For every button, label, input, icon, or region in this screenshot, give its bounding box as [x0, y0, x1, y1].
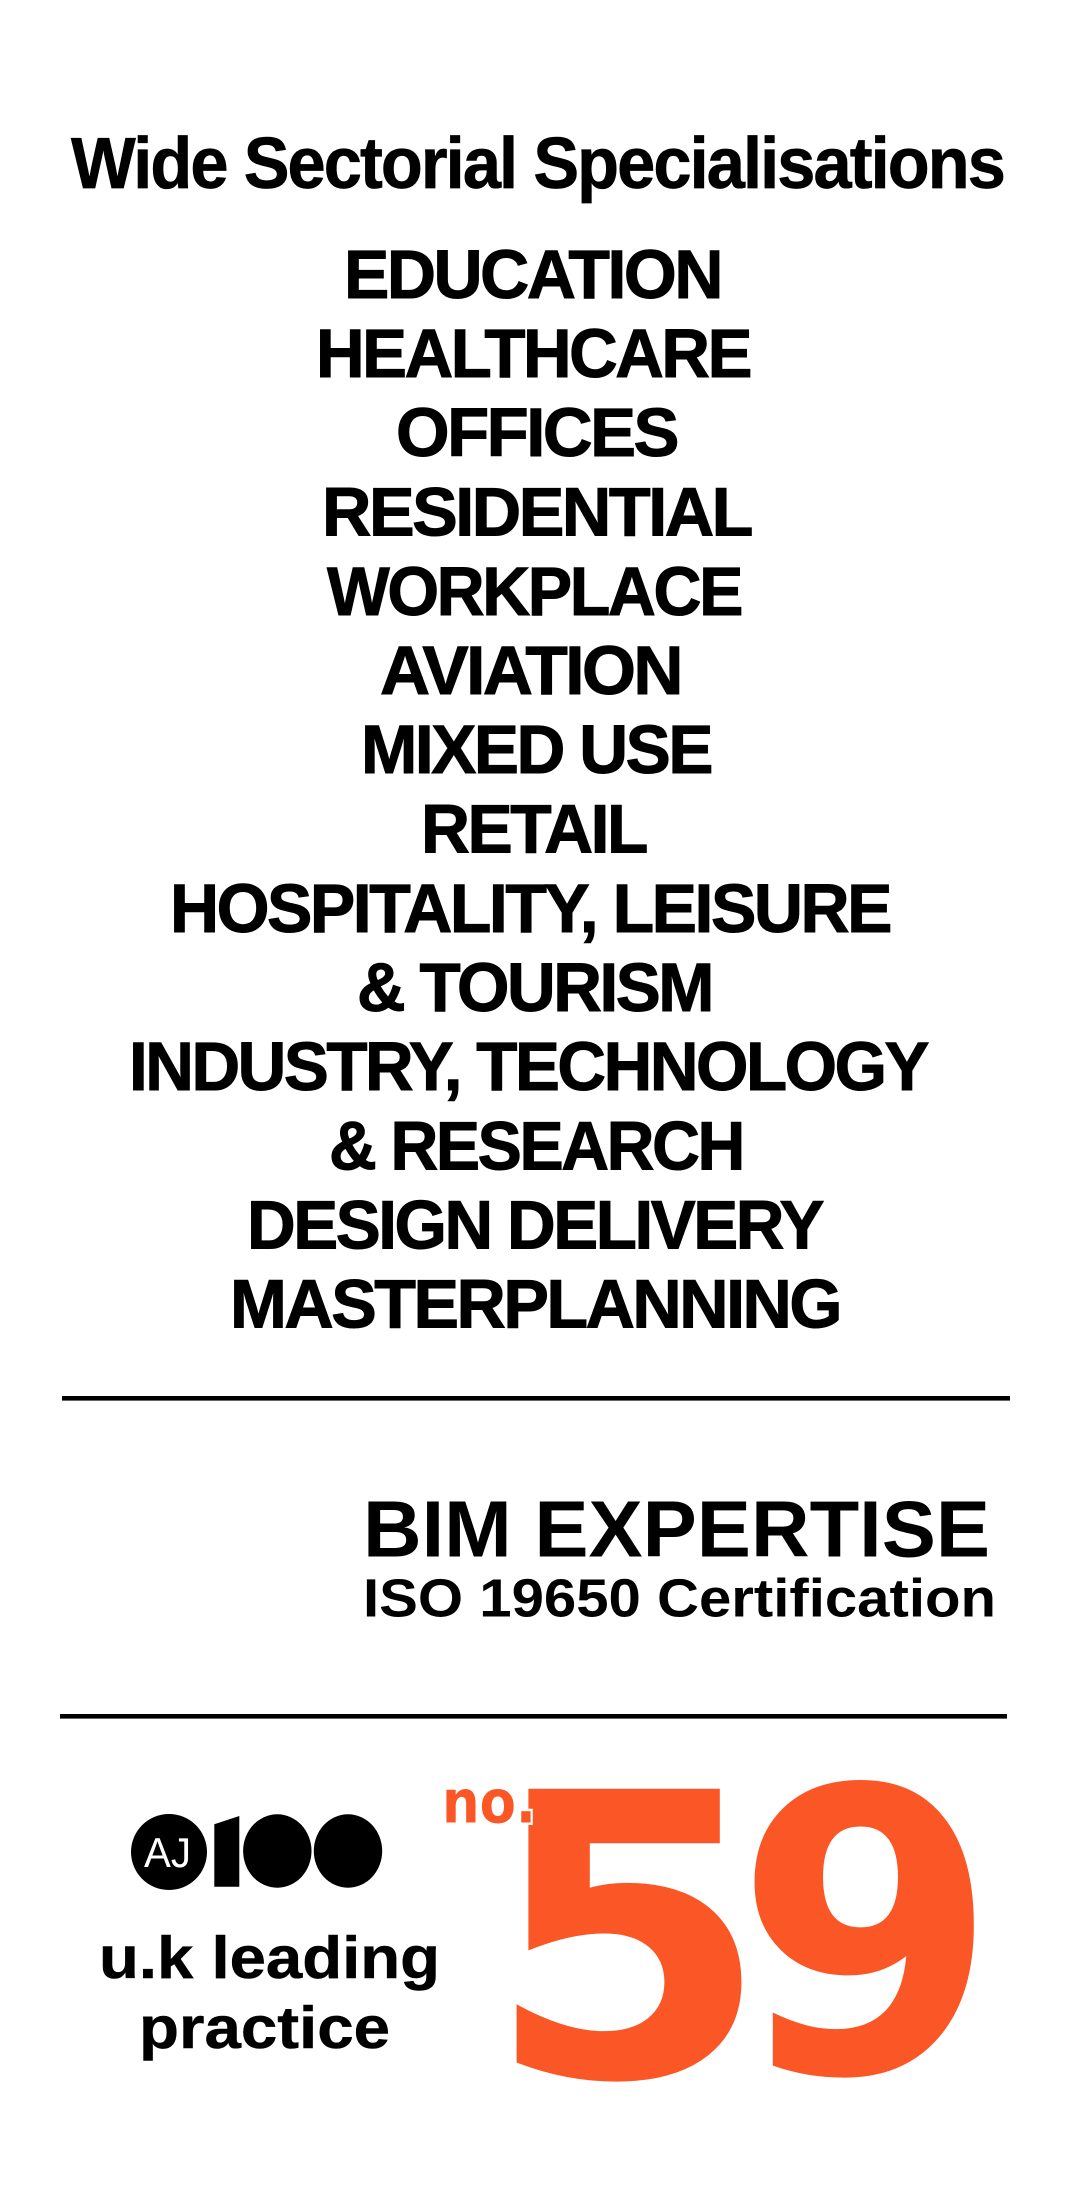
sector: and research: & RESEARCH: [329, 1108, 743, 1184]
text: u.k leading: u.k leading: [99, 1925, 440, 1991]
heading: BIM expertise: BIM EXPERTISE: [363, 1485, 990, 1574]
number: 59: 5: [485, 1710, 770, 2169]
sector: masterplanning: MASTERPLANNING: [230, 1266, 840, 1342]
sector: hospitality, leisure: HOSPITALITY, LEISURE: [170, 870, 890, 947]
panel: AJ100 ranking: [99, 1706, 998, 2169]
number: 59: 9: [735, 1706, 998, 2165]
text: practice: practice: [139, 1995, 390, 2061]
sector: and tourism: & TOURISM: [357, 949, 712, 1026]
text: ISO certification: ISO 19650 Certification: [363, 1569, 996, 1629]
sector: industry, technology: INDUSTRY, TECHNOLOGY: [129, 1028, 928, 1105]
sector: design delivery: DESIGN DELIVERY: [247, 1186, 823, 1264]
panel: sector list: [129, 236, 928, 1342]
label: no.: no.: [442, 1768, 536, 1838]
sector: aviation: AVIATION: [380, 632, 681, 709]
sector: retail: RETAIL: [421, 790, 647, 868]
sector: education: EDUCATION: [344, 236, 721, 313]
icon: AJ100 logo: [131, 1814, 382, 1890]
sector: workplace: WORKPLACE: [327, 553, 741, 630]
panel: BIM expertise: [363, 1485, 996, 1629]
sector: offices: OFFICES: [396, 394, 677, 471]
number: 59: [485, 1706, 998, 2169]
sector: healthcare: HEALTHCARE: [316, 315, 750, 392]
icon: AJ100 logo: AJ: [144, 1829, 191, 1876]
sector: residential: RESIDENTIAL: [322, 474, 752, 550]
title: Wide Sectorial Specialisations: [71, 124, 1004, 204]
sector: mixed use: MIXED USE: [361, 711, 711, 788]
